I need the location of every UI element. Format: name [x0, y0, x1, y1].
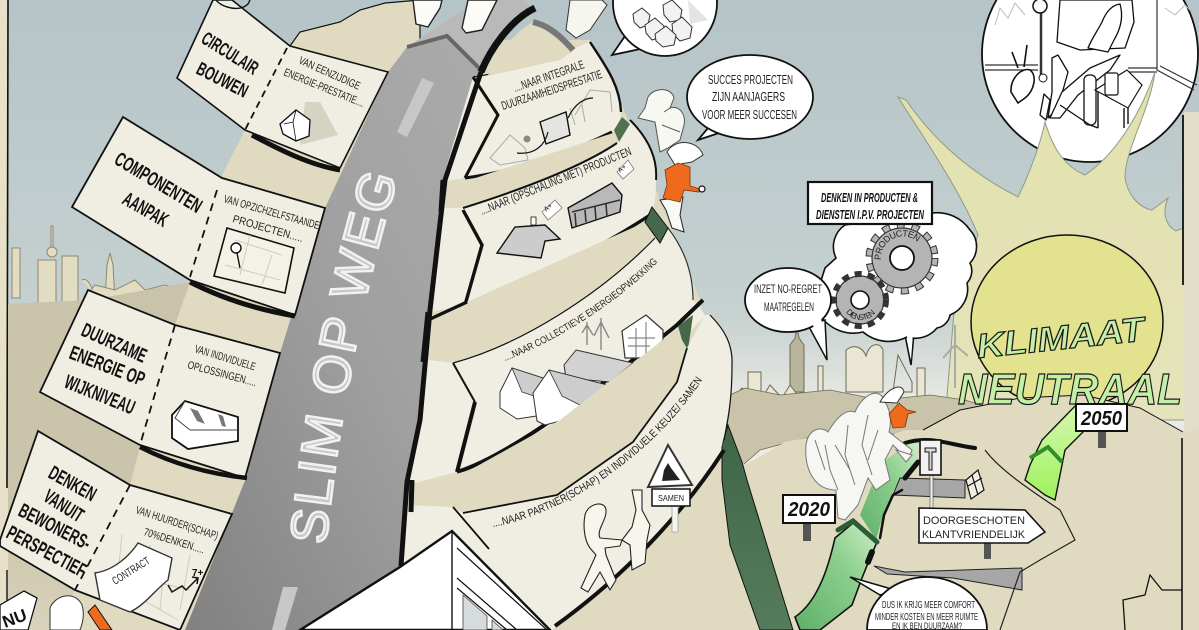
- icon: houses with solar roofs and apartment block: [500, 315, 663, 425]
- sign: doorgeschoten klantvriendelijk: [919, 508, 1045, 559]
- thought cloud: gears: [821, 212, 978, 366]
- icon: flat roof building: A+: [617, 164, 628, 175]
- icon: contract with growth arrow: [95, 534, 204, 620]
- panel: componenten aanpak: PROJECTEN.....: [231, 213, 305, 245]
- panel: circulair bouwen: VAN EENZIJDIGE: [297, 55, 362, 93]
- figure: orange runner on tower: [660, 143, 705, 232]
- hill top behind road: [245, 0, 420, 170]
- panel: denken vanuit bewonersperspectief: [0, 431, 232, 630]
- icon: road work sign samen: [648, 445, 692, 532]
- sun disc: [971, 235, 1163, 409]
- icon: contract with growth arrow: 7+: [192, 568, 204, 579]
- panel: naar opschaling met producten: ....NAAR (OPSCHALING MET) PRODUCTEN: [478, 144, 633, 218]
- sign: T-junction: [920, 440, 941, 510]
- panel: naar collectieve energieopwekking: ....NAAR COLLECTIEVE ENERGIEOPWEKKING: [505, 258, 657, 361]
- icon: house with solar panels: [172, 401, 238, 449]
- speech bubble: meer comfort: [850, 577, 987, 630]
- band one: [448, 133, 617, 208]
- panel: denken vanuit bewonersperspectief: 70%DENKEN.....: [142, 526, 206, 556]
- right page margin: [1183, 112, 1199, 630]
- speech bubble: meer comfort: DUS IK KRIJG MEER COMFORT: [882, 600, 975, 611]
- speech bubble: houses: [612, 0, 717, 56]
- figure: person at top of hill: [566, 0, 607, 38]
- sign: 2050: 2050: [1080, 408, 1122, 430]
- panel: duurzame energie op wijkniveau: OPLOSSINGEN.....: [186, 359, 258, 389]
- label: denken in producten en diensten: DENKEN IN PRODUCTEN &: [821, 190, 918, 205]
- panel: naar collectieve energieopwekking: [410, 206, 705, 483]
- skyline left: [12, 226, 185, 312]
- dark green slope: [722, 425, 793, 630]
- speech bubble: inzet no-regret: [745, 268, 831, 360]
- panel: naar integrale duurzaamheidsprestatie: DUURZAAMHEIDSPRESTATIE: [500, 67, 604, 113]
- top walker on road: [413, 0, 497, 33]
- panel: circulair bouwen: ENERGIE-PRESTATIE....: [282, 67, 366, 110]
- speech bubble: succes projecten: VOOR MEER SUCCESEN: [702, 107, 797, 122]
- panel: duurzame energie op wijkniveau: WIJKNIVEAU: [61, 371, 138, 419]
- sign: doorgeschoten klantvriendelijk: DOORGESCHOTEN: [923, 515, 1025, 527]
- gray side roads: [874, 478, 1022, 590]
- icon: flat roof building: [568, 160, 634, 228]
- sign: doorgeschoten klantvriendelijk: KLANTVRIENDELIJK: [922, 529, 1026, 541]
- band three: [417, 328, 687, 513]
- icon: road work sign samen: SAMEN: [658, 494, 684, 503]
- panel: componenten aanpak: [72, 117, 325, 316]
- gear: diensten: DIENSTEN: [846, 308, 875, 320]
- big hill right: [555, 395, 1199, 630]
- green route lower: [795, 523, 877, 630]
- left page margin: [0, 0, 8, 630]
- black route edges: [838, 440, 975, 562]
- panel: duurzame energie op wijkniveau: VAN INDIVIDUELE: [193, 343, 257, 373]
- lamp: [1033, 0, 1047, 82]
- crowd of walkers: [806, 393, 912, 520]
- panel: circulair bouwen: [177, 0, 388, 170]
- title: klimaat neutraal: NEUTRAAL: [958, 365, 1182, 414]
- panel: denken vanuit bewonersperspectief: PERSPECTIEF: [3, 522, 90, 582]
- panel: circulair bouwen: CIRCULAIR: [197, 28, 262, 80]
- tower body: [55, 40, 730, 630]
- sign: 2020: 2020: [787, 499, 830, 521]
- icon: contract with growth arrow: CONTRACT: [110, 555, 152, 588]
- panel: denken vanuit bewonersperspectief: BEWONERS-: [15, 500, 94, 555]
- orange walker: [880, 387, 916, 428]
- panel: duurzame energie op wijkniveau: [40, 290, 280, 478]
- icon: renovation steps: [490, 90, 612, 165]
- green route to 2050: [1025, 405, 1085, 500]
- sign: 2020: [783, 495, 835, 541]
- label: denken in producten en diensten: [808, 182, 932, 224]
- gear: diensten: [832, 271, 889, 329]
- gear: producten: [866, 225, 938, 294]
- figure: orange walker at start: [50, 596, 112, 630]
- panel: duurzame energie op wijkniveau: ENERGIE OP: [66, 342, 148, 391]
- speech bubble: inzet no-regret: INZET NO-REGRET: [754, 282, 822, 296]
- figures: shaking hands: [581, 490, 650, 592]
- road: slim op weg: [185, 0, 530, 630]
- side table with mug: [1095, 70, 1142, 128]
- green route upper: [860, 440, 918, 540]
- panel: naar partnerschap en individuele keuze samen: ....NAAR PARTNER(SCHAP) EN INDIVIDUELE KEUZE/ SAMEN: [494, 376, 702, 527]
- gear: producten: PRODUCTEN: [874, 230, 920, 260]
- icon: solar roof: A+: [543, 203, 554, 214]
- white building: [300, 531, 550, 630]
- sign: nu: [0, 591, 37, 630]
- speech bubble: succes projecten: ZIJN AANJAGERS: [712, 89, 785, 104]
- speech bubble: inzet no-regret: MAATREGELEN: [764, 300, 814, 314]
- pocket at top of road: [488, 22, 575, 75]
- right hill outline: [985, 450, 1075, 630]
- sun rays: [898, 72, 1199, 420]
- speech bubble: succes projecten: SUCCES PROJECTEN: [708, 72, 793, 87]
- title: klimaat neutraal: [958, 310, 1182, 414]
- panel: denken vanuit bewonersperspectief: VANUIT: [39, 486, 87, 527]
- panel: duurzame energie op wijkniveau: DUURZAME: [78, 319, 150, 368]
- road: slim op weg: SLIM OP WEG: [290, 172, 395, 544]
- panel: naar partnerschap en individuele keuze samen: [404, 314, 733, 630]
- panel: naar integrale duurzaamheidsprestatie: [442, 42, 621, 182]
- ground left: [8, 282, 190, 630]
- panel: denken vanuit bewonersperspectief: VAN HUURDER(SCHAP): [134, 504, 220, 542]
- tree line: [725, 388, 990, 465]
- road edge: [401, 72, 481, 566]
- panel: naar integrale duurzaamheidsprestatie: ....NAAR INTEGRALE: [511, 58, 586, 95]
- title: klimaat neutraal: KLIMAAT: [975, 310, 1149, 366]
- panel: componenten aanpak: VAN OPZICHZELFSTAANDE: [222, 193, 321, 232]
- figures: two colleagues: [638, 90, 684, 152]
- panel: denken vanuit bewonersperspectief: DENKEN: [45, 462, 100, 506]
- robot vacuum: [1011, 45, 1034, 103]
- person in armchair: [1040, 0, 1134, 128]
- skyline right: [733, 325, 968, 398]
- panel: componenten aanpak: AANPAK: [118, 188, 172, 232]
- crate icon: [966, 470, 984, 499]
- icon: solar roof: [497, 200, 562, 258]
- panel: componenten aanpak: COMPONENTEN: [110, 148, 206, 218]
- speech bubble: succes projecten: [687, 55, 813, 140]
- speech bubble: meer comfort: MINDER KOSTEN EN MEER RUIMTE: [875, 612, 978, 623]
- icon: city map with pin: [214, 228, 294, 293]
- label: denken in producten en diensten: DIENSTEN I.P.V. PROJECTEN: [816, 207, 924, 222]
- sign: 2050: [1076, 404, 1127, 448]
- band two: [432, 220, 660, 363]
- big circle: residents at home: [982, 0, 1198, 162]
- panel: circulair bouwen: BOUWEN: [193, 59, 251, 102]
- icon: house with stairs: [280, 102, 338, 145]
- panel: naar opschaling met producten: [430, 117, 656, 312]
